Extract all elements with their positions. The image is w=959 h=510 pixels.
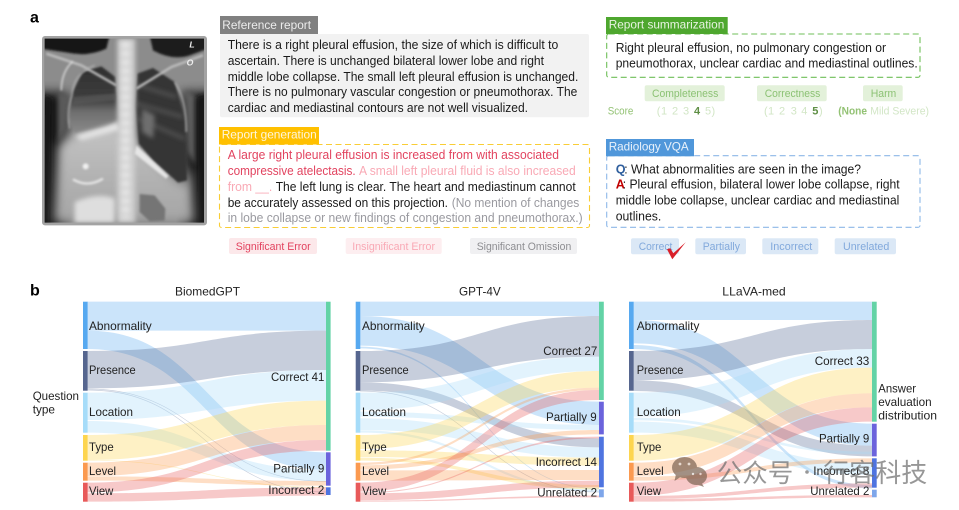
tag: completeness <box>645 85 725 101</box>
chart: GPT-4V sankey <box>356 285 604 502</box>
reference report text: middle lobe collapse. The small left pleural effusion is unchanged. <box>228 70 578 84</box>
labels: answer evaluation: Correct 41 <box>271 370 325 384</box>
tag: unrelated: Unrelated <box>843 241 889 253</box>
labels: answer evaluation: Partially 9 <box>273 461 325 475</box>
labels: answer evaluation: Incorrect 2 <box>268 483 325 497</box>
labels: question types: Presence <box>637 363 684 377</box>
score scales: ) <box>819 106 823 118</box>
axis label: question type: type <box>33 402 55 416</box>
panel: report summarization <box>606 17 920 77</box>
reference report text: ascertain. There is unchanged bilateral lower lobe and right <box>228 54 544 68</box>
labels: question types <box>89 319 152 498</box>
score scales: 4 <box>694 106 701 118</box>
score scales: 3 <box>683 106 689 118</box>
report generation text: A large right pleural effusion is increased from with associated <box>228 148 559 162</box>
tag: correctness: Correctness <box>765 88 821 100</box>
labels: question types: View <box>637 484 661 498</box>
score scales: ( <box>657 106 661 118</box>
labels: answer evaluation: Correct 27 <box>543 344 598 358</box>
reference report box <box>220 34 589 117</box>
summarization text: pneumothorax, unclear cardiac and mediastinal outlines. <box>616 57 918 71</box>
labels: question types: Type <box>362 440 387 454</box>
tag: correct <box>631 238 679 254</box>
ribbons: GPT-4V flows <box>360 302 599 502</box>
tag: insignificant error <box>346 238 442 254</box>
reference report text: There is a right pleural effusion, the size of which is difficult to <box>228 38 558 52</box>
VQA dashed box <box>607 156 920 227</box>
report generation text: (No mention of changes <box>452 196 579 210</box>
tag: significant omission <box>470 238 577 254</box>
chart: BiomedGPT sankey <box>83 285 331 502</box>
tag: harm: Harm <box>871 88 896 100</box>
score scales <box>608 106 929 118</box>
labels: question types: Location <box>89 405 133 419</box>
tag: incorrect: Incorrect <box>770 241 812 253</box>
VQA text: outlines. <box>616 210 661 224</box>
icon: red check mark <box>667 242 686 259</box>
labels: question types: Type <box>89 440 114 454</box>
report generation text: from __. <box>228 180 272 194</box>
VQA text: : Pleural effusion, bilateral lower lobe collapse, right <box>623 178 900 192</box>
labels: question types: Presence <box>89 363 136 377</box>
report generation text: The left lung is clear. The heart and mediastinum cannot <box>276 180 576 194</box>
nodes: question types <box>83 302 88 502</box>
labels: question types: Level <box>637 464 664 478</box>
chart title: LLaVA-med: LLaVA-med <box>722 285 786 299</box>
labels: question types: Abnormality <box>637 319 699 333</box>
nodes: answer evaluation <box>599 302 604 497</box>
icon: WeChat bubbles <box>672 457 707 487</box>
labels: question types: Level <box>89 464 116 478</box>
tag: partially <box>695 238 746 254</box>
report generation text: compressive atelectasis. <box>228 164 356 178</box>
tag: partially: Partially <box>703 241 740 253</box>
VQA text <box>616 163 900 224</box>
reference report text <box>228 38 578 115</box>
labels: question types <box>637 319 699 498</box>
panel label: a: a <box>30 10 39 27</box>
report generation text: A small left pleural fluid is also increased <box>359 164 576 178</box>
labels: answer evaluation: Partially 9 <box>546 410 597 424</box>
labels: question types: View <box>362 484 387 498</box>
VQA text: A <box>616 178 625 192</box>
nodes: answer evaluation <box>872 302 877 497</box>
VQA text: middle lobe collapse, unclear cardiac and mediastinal <box>616 194 899 208</box>
labels: question types: Abnormality <box>362 319 425 333</box>
panel: radiology VQA <box>606 139 920 227</box>
tag: completeness: Completeness <box>652 88 719 100</box>
chart: LLaVA-med sankey <box>629 285 877 502</box>
VQA text: : What abnormalities are seen in the image? <box>624 163 861 177</box>
labels: question types: Location <box>362 405 406 419</box>
chart title: GPT-4V: GPT-4V <box>459 285 501 299</box>
reference report heading: Reference report <box>222 18 312 32</box>
axis label: answer evaluation distribution: evaluation <box>878 395 932 409</box>
labels: question types: Presence <box>362 363 409 377</box>
axis label: question type: Question <box>33 389 79 403</box>
report generation dashed box <box>220 144 590 228</box>
axis label: question type <box>33 389 79 416</box>
watermark brand: 行客科技 <box>823 458 927 488</box>
report generation heading: Report generation <box>222 128 317 142</box>
labels: question types: Type <box>637 440 662 454</box>
labels: answer evaluation: Incorrect 8 <box>813 464 870 478</box>
labels: question types: Abnormality <box>89 319 152 333</box>
labels: answer evaluation <box>536 344 598 500</box>
image: chest X-ray: L <box>189 39 195 49</box>
score scales: 5 <box>705 106 711 118</box>
labels: answer evaluation: Unrelated 2 <box>537 486 597 500</box>
image: chest X-ray <box>42 36 207 226</box>
score scales: 1 <box>661 106 667 118</box>
tag: unrelated <box>835 238 896 254</box>
score scales: Score <box>608 106 633 118</box>
labels: question types: Level <box>362 464 389 478</box>
score scales: 5 <box>812 106 818 118</box>
panel label: b: b <box>30 283 40 300</box>
score scales: ) <box>712 106 715 118</box>
report generation text: be accurately assessed on this projection. <box>228 196 448 210</box>
panel: report generation <box>219 127 590 228</box>
VQA heading: Radiology VQA <box>609 140 689 154</box>
labels: question types: Location <box>637 405 681 419</box>
labels: answer evaluation: Partially 9 <box>819 432 870 446</box>
axis label: answer evaluation distribution: distribution <box>878 409 937 423</box>
report generation text <box>228 148 583 225</box>
tag: harm <box>863 85 903 101</box>
report generation text: in lobe collapse or new findings of congestion and pneumothorax.) <box>228 211 583 225</box>
summarization text: Right pleural effusion, no pulmonary congestion or <box>616 41 886 55</box>
labels: answer evaluation <box>810 354 870 498</box>
image: chest X-ray: O <box>187 57 194 67</box>
labels: answer evaluation: Unrelated 2 <box>810 484 870 498</box>
score scales: 1 <box>768 106 774 118</box>
labels: answer evaluation: Correct 33 <box>815 354 870 368</box>
tag: significant error: Significant Error <box>236 241 311 253</box>
reference report text: There is no pulmonary vascular congestion or pneumothorax. The <box>228 85 577 99</box>
summarization text <box>616 41 918 71</box>
score scales: Mild Severe) <box>870 106 929 118</box>
labels: question types <box>362 319 425 498</box>
panel: reference report <box>220 16 589 117</box>
watermark: WeChat official account <box>672 457 927 488</box>
tag: significant error <box>229 238 317 254</box>
labels: answer evaluation <box>268 370 325 497</box>
chart title: BiomedGPT: BiomedGPT <box>175 285 241 299</box>
score scales: 2 <box>672 106 678 118</box>
score scales: 4 <box>801 106 807 118</box>
tag: significant omission: Significant Omission <box>477 241 571 253</box>
nodes: question types <box>629 302 634 502</box>
tag: incorrect <box>762 238 818 254</box>
watermark text: 公众号 <box>717 460 793 488</box>
score scales: ( <box>764 106 768 118</box>
tag: insignificant error: Insignificant Error <box>352 241 435 253</box>
reference report text: cardiac and mediastinal contours are not well visualized. <box>228 101 528 115</box>
ribbons: BiomedGPT flows <box>87 302 326 502</box>
labels: question types: View <box>89 484 114 498</box>
axis label: answer evaluation distribution <box>878 382 937 423</box>
summarization dashed box <box>607 34 920 77</box>
VQA text: Q <box>616 163 626 177</box>
ribbons: LLaVA-med flows <box>634 302 872 502</box>
watermark dot <box>805 470 809 474</box>
score scales: (None <box>838 106 867 118</box>
tag: correctness <box>757 85 827 101</box>
score scales: 3 <box>791 106 797 118</box>
summarization heading: Report summarization <box>609 18 724 32</box>
labels: answer evaluation: Incorrect 14 <box>536 455 597 469</box>
score scales: 2 <box>779 106 785 118</box>
axis label: answer evaluation distribution: Answer <box>878 382 916 396</box>
tag: correct: Correct <box>639 241 672 253</box>
nodes: answer evaluation <box>326 302 331 495</box>
nodes: question types <box>356 302 360 502</box>
